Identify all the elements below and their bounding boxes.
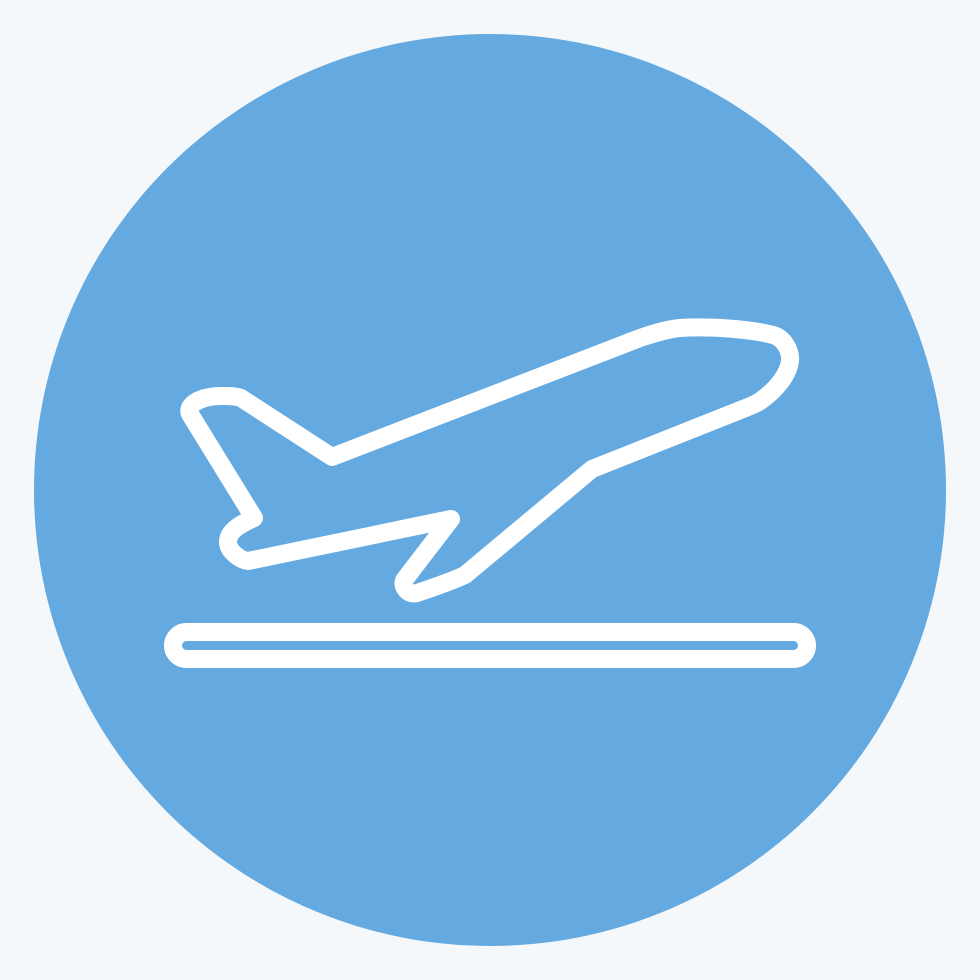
icon: runway — [173, 632, 807, 659]
icon: airplane outline — [189, 327, 790, 594]
